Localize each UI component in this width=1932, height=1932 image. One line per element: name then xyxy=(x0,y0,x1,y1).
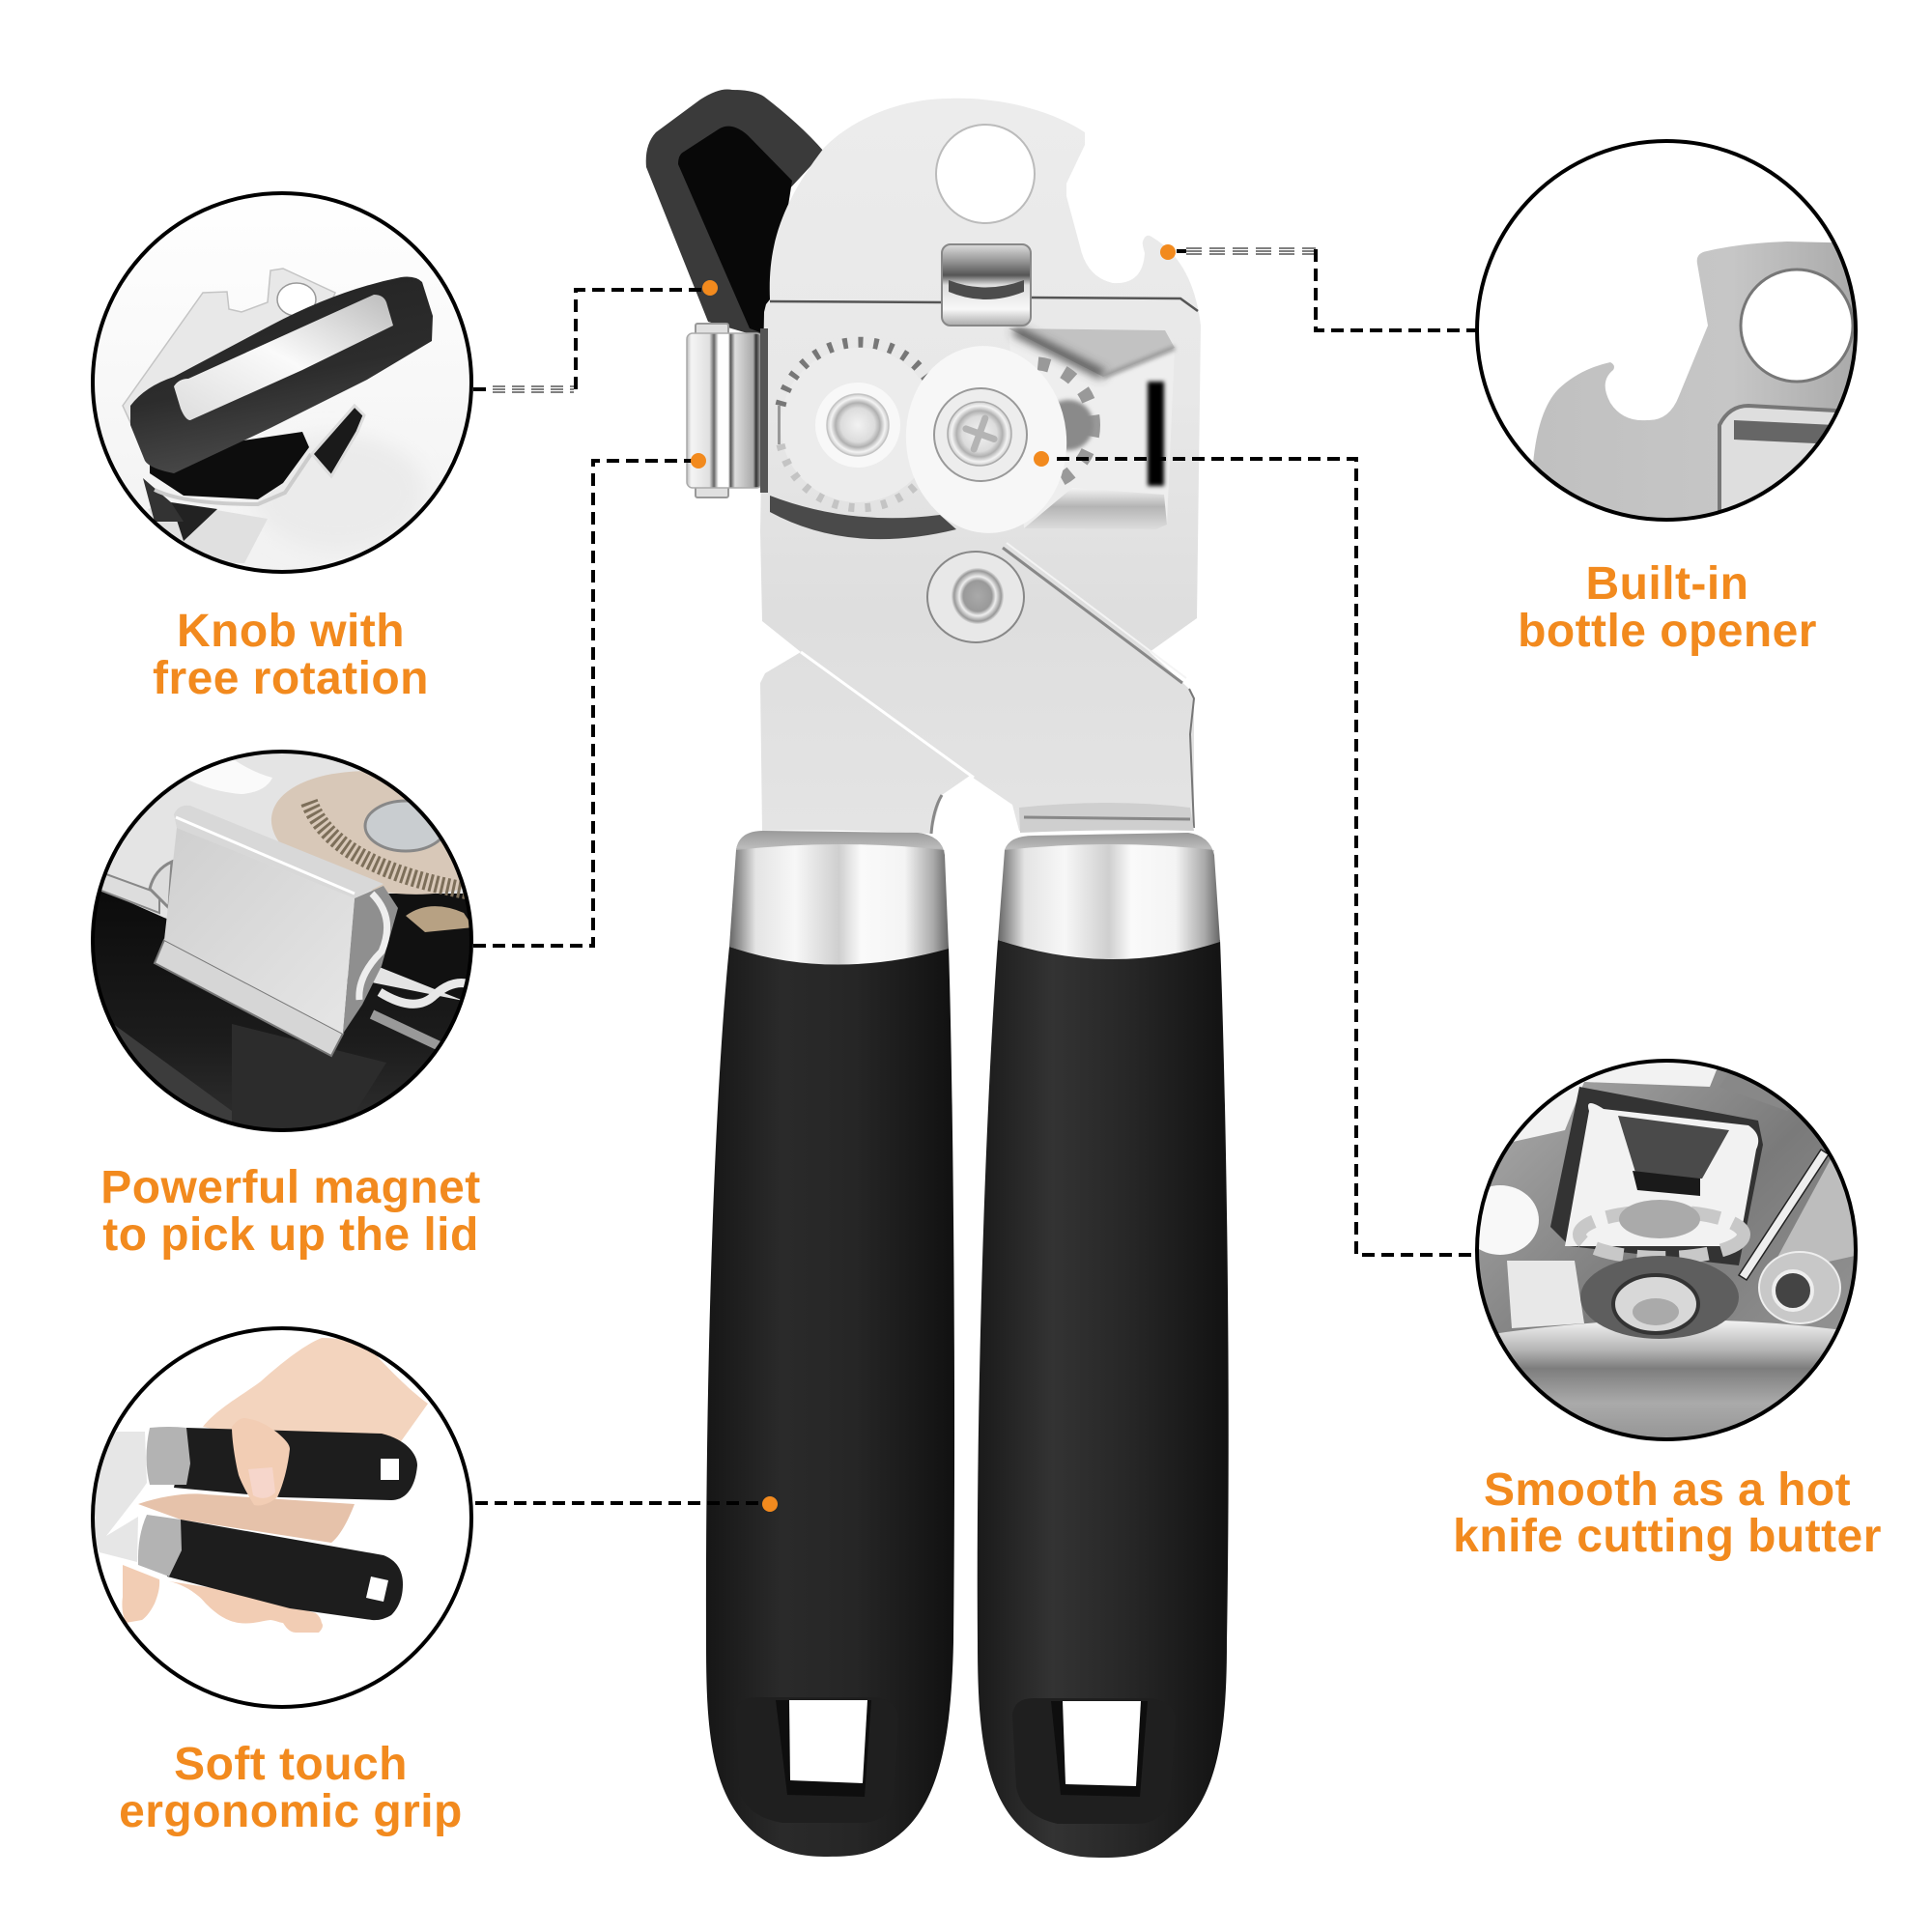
circle: magnet detail xyxy=(91,750,473,1132)
left handle xyxy=(706,831,954,1857)
cutting wheel xyxy=(896,338,1076,541)
orange marker dots xyxy=(691,244,1176,1512)
star washer xyxy=(970,363,1094,487)
circle: soft grip with hand xyxy=(87,1323,473,1719)
leader line: cutting wheel xyxy=(1057,459,1476,1255)
gear xyxy=(778,342,939,508)
circle: knob detail xyxy=(87,184,473,580)
leader line: bottle opener xyxy=(1177,248,1476,330)
magnet xyxy=(687,324,768,497)
circle: bottle opener detail xyxy=(1468,135,1864,541)
can opener product xyxy=(646,89,1229,1858)
label: magnet: to pick up the lid xyxy=(102,1209,479,1261)
right handle xyxy=(978,833,1229,1858)
label: bottle opener: Built-in xyxy=(1586,558,1748,610)
label: cutting wheel: Smooth as a hot xyxy=(1484,1464,1851,1516)
lower crescent shadow xyxy=(770,496,956,539)
rubber knob behind the head xyxy=(646,89,824,335)
leader line: grip xyxy=(475,1501,763,1505)
label: grip: ergonomic grip xyxy=(119,1786,463,1837)
label: bottle opener: bottle opener xyxy=(1518,606,1817,657)
label: cutting wheel: knife cutting butter xyxy=(1453,1511,1882,1562)
pivot rivet xyxy=(927,552,1024,642)
label: magnet: Powerful magnet xyxy=(100,1162,481,1213)
leader line: knob xyxy=(473,290,701,392)
leader line: magnet xyxy=(473,461,692,946)
label: knob: free rotation xyxy=(153,653,429,704)
recessed cutter housing xyxy=(1009,328,1175,529)
label: knob: Knob with xyxy=(177,606,405,657)
spring bracket xyxy=(942,244,1031,326)
circle: cutting wheel detail xyxy=(1462,1058,1864,1459)
steel plates xyxy=(760,99,1201,834)
label: grip: Soft touch xyxy=(174,1739,408,1790)
